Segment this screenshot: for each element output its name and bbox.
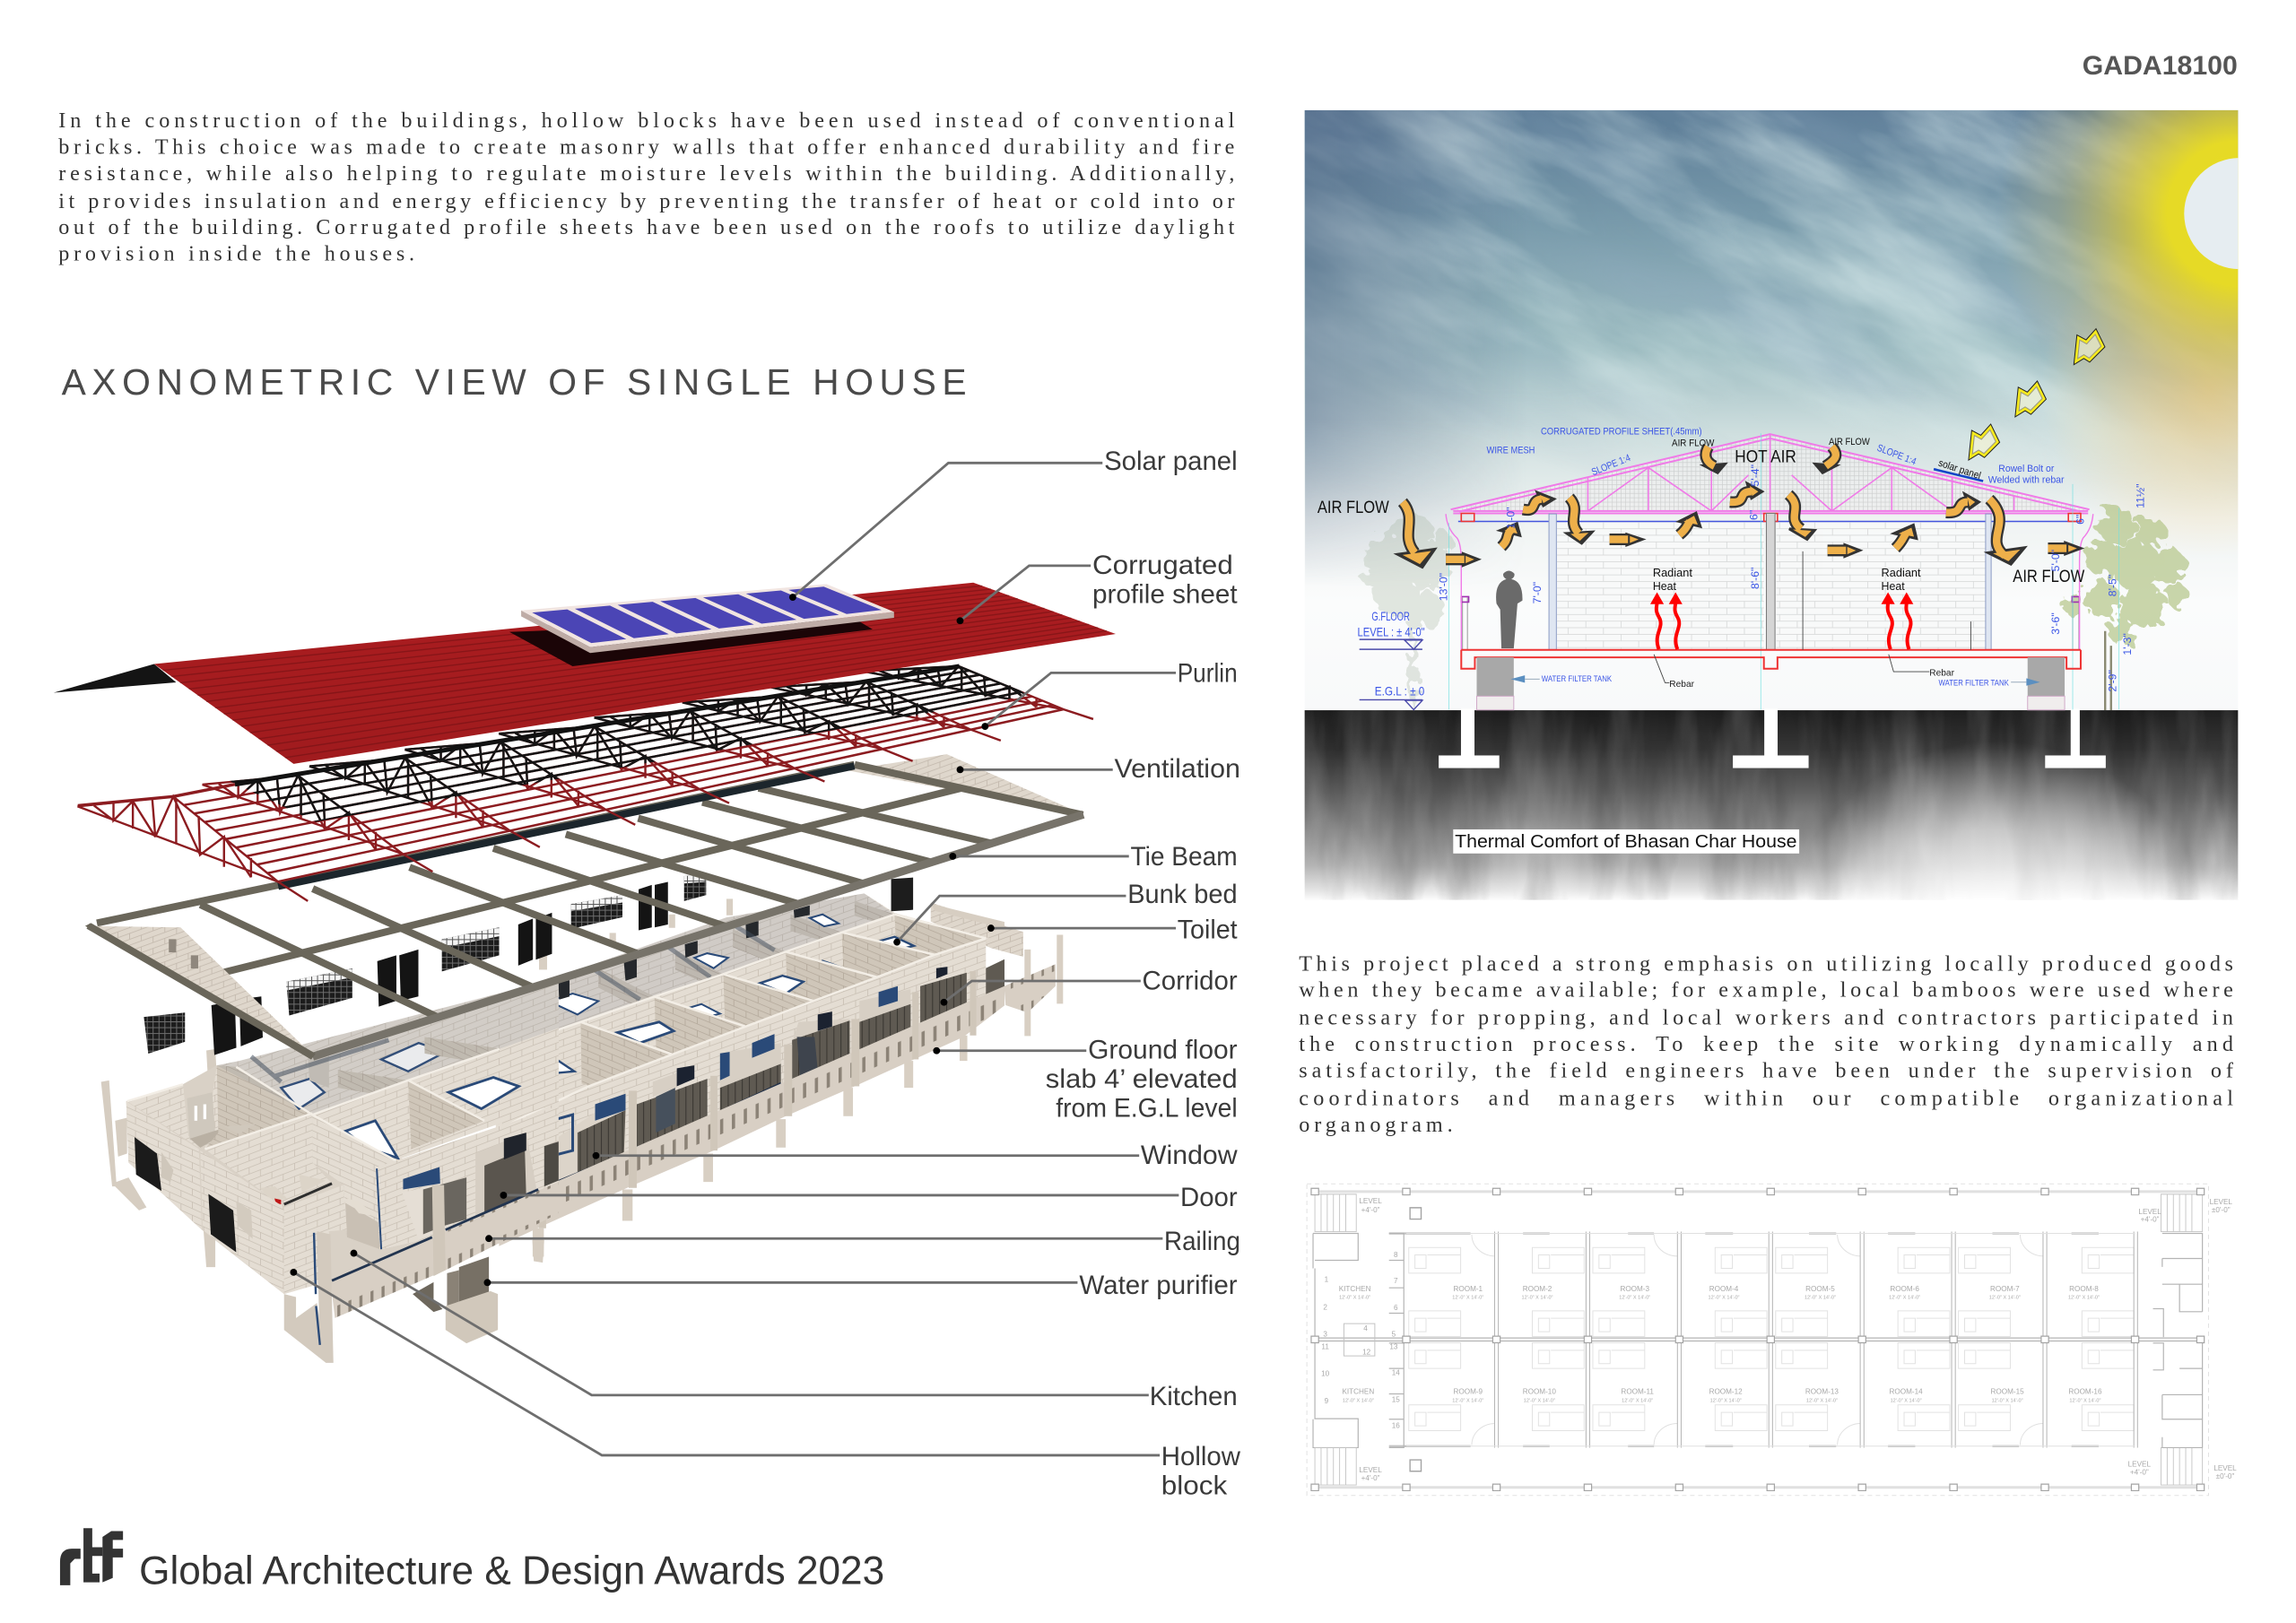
plan room sizes: 12'-0" X 14'-0" xyxy=(1806,1399,1838,1404)
plan labels xyxy=(1339,1197,2237,1482)
air flow arrows xyxy=(1397,447,2081,567)
plan kitchen numbers: 7 xyxy=(1394,1277,1398,1285)
panel: thermal comfort section image xyxy=(1304,109,2239,900)
section annotations: 13'-0" xyxy=(1437,573,1449,601)
section annotations: SLOPE 1:4 xyxy=(1875,443,1918,467)
small plinths xyxy=(1410,1208,1422,1219)
section annotations: Rebar xyxy=(1929,669,1955,679)
text block: hollow blocks description: out of the building. Corrugated profile sheets have been used on the roofs to utilize daylight xyxy=(58,215,1235,239)
component labels: Kitchen xyxy=(1150,1382,1238,1411)
axonometric exploded drawing xyxy=(54,447,1241,1501)
beam shadows xyxy=(518,924,775,1000)
leader lines and dots xyxy=(290,463,1178,1455)
solar panel on section xyxy=(1934,469,1983,482)
level markers xyxy=(1360,639,1422,709)
section annotations: 2'-9" xyxy=(2107,670,2119,692)
left tree xyxy=(1361,512,1453,710)
section annotations: Rowel Bolt or xyxy=(1998,464,2055,474)
plan labels: ROOM-12 xyxy=(1709,1388,1743,1396)
right tree xyxy=(2063,507,2187,644)
plan kitchen numbers: 4 xyxy=(1363,1324,1368,1332)
railing pillars xyxy=(539,971,977,1228)
plan labels: +4'-0" xyxy=(1361,1206,1380,1214)
section annotations xyxy=(1318,426,2147,699)
room end walls xyxy=(1389,1234,2099,1446)
toilets xyxy=(2153,1234,2203,1447)
text block: local goods: organogram. xyxy=(1299,1113,1453,1137)
text block: local goods: This project placed a strong emphasis on utilizing locally produced goods xyxy=(1299,951,2233,976)
plan room sizes: 12'-0" X 14'-0" xyxy=(1522,1295,1553,1300)
plan labels: ROOM-1 xyxy=(1454,1285,1483,1293)
section annotations: 1'-3" xyxy=(2121,633,2134,655)
near corner stair xyxy=(284,1294,326,1363)
plan room sizes: 12'-0" X 14'-0" xyxy=(1524,1399,1555,1404)
plan kitchen numbers: 9 xyxy=(1325,1397,1329,1405)
section annotations: 11½" xyxy=(2135,483,2147,508)
plan room sizes: 12'-0" X 14'-0" xyxy=(1889,1295,1920,1300)
plan room sizes: 12'-0" X 14'-0" xyxy=(1710,1399,1742,1404)
plan kitchen numbers: 15 xyxy=(1392,1395,1400,1403)
component labels: Window xyxy=(1141,1141,1238,1170)
section annotations: solar panel xyxy=(1937,458,1982,482)
corrugated roof xyxy=(54,583,1116,764)
slab and beams xyxy=(1461,650,2081,669)
plan kitchen numbers: 14 xyxy=(1392,1368,1400,1376)
section annotations: 6" xyxy=(2074,515,2087,525)
plan room sizes: 12'-0" X 14'-0" xyxy=(2069,1399,2100,1404)
plan kitchen numbers: 12 xyxy=(1362,1349,1371,1357)
section annotations: AIR FLOW xyxy=(1672,438,1715,449)
beams xyxy=(1315,1192,2201,1488)
caption: thermal comfort: Thermal Comfort of Bhasan Char House xyxy=(1455,831,1796,852)
component labels: Purlin xyxy=(1178,659,1238,689)
section annotations: 1'-0" xyxy=(1505,507,1518,529)
plan labels: ROOM-5 xyxy=(1805,1285,1835,1293)
corridor railing left part xyxy=(330,1182,559,1318)
door swings xyxy=(1472,1235,2043,1445)
section annotations: Radiant xyxy=(1653,566,1692,579)
right end wing, posts and railing extension xyxy=(931,902,1060,1036)
text block: hollow blocks description: bricks. This choice was made to create masonry walls that offer enhanced durability and fire xyxy=(58,135,1234,159)
plan labels: LEVEL xyxy=(1359,1197,1382,1205)
sun xyxy=(2184,158,2239,269)
wall top caps xyxy=(502,915,986,1055)
truss roof xyxy=(1451,434,2090,514)
plan labels: KITCHEN xyxy=(1339,1285,1371,1293)
section annotations: WATER FILTER TANK xyxy=(1939,678,2009,687)
text block: local goods: necessary for propping, and local workers and contractors participated in xyxy=(1299,1006,2233,1030)
plan kitchen numbers: 8 xyxy=(1394,1251,1398,1259)
plan outline xyxy=(1307,1184,2209,1496)
text block: local goods xyxy=(1299,951,2234,1137)
logo: rtf xyxy=(60,1528,123,1585)
section annotations: E.G.L : ± 0 xyxy=(1375,684,1425,699)
plan kitchen numbers xyxy=(1321,1251,1400,1430)
section annotations: 5'-0" xyxy=(2049,550,2062,571)
plan labels: ROOM-11 xyxy=(1621,1388,1654,1396)
section annotations: WATER FILTER TANK xyxy=(1542,674,1612,683)
tie beam grid with gables xyxy=(85,754,1083,1060)
plan labels: KITCHEN xyxy=(1342,1388,1374,1396)
plan labels: +4'-0" xyxy=(1361,1474,1380,1482)
tree trunk xyxy=(2105,631,2111,710)
plan labels: ROOM-9 xyxy=(1454,1388,1483,1396)
component labels: profile sheet xyxy=(1092,580,1238,610)
plan labels: ±0'-0" xyxy=(2212,1206,2231,1214)
plan room sizes: 12'-0" X 14'-0" xyxy=(1452,1399,1483,1404)
plan room sizes: 12'-0" X 14'-0" xyxy=(1989,1295,2021,1300)
wall top caps xyxy=(127,1049,500,1163)
plan kitchen numbers: 10 xyxy=(1321,1369,1330,1377)
component labels: Solar panel xyxy=(1104,447,1238,476)
columns xyxy=(1311,1188,2205,1490)
component labels: Corridor xyxy=(1143,967,1238,996)
text block: local goods: the construction process. To keep the site working dynamically and xyxy=(1299,1032,2233,1056)
solar panel xyxy=(509,584,894,666)
text block: hollow blocks description: provision inside the houses. xyxy=(58,242,414,266)
section annotations: 8'-5" xyxy=(2107,575,2119,596)
far row left xyxy=(127,977,559,1167)
component labels xyxy=(1046,447,1241,1501)
component labels: from E.G.L level xyxy=(1056,1094,1238,1124)
plan labels: ROOM-2 xyxy=(1523,1285,1552,1293)
component labels: Ventilation xyxy=(1115,754,1240,784)
corner post and pillars xyxy=(314,1185,538,1363)
heading: axonometric view: AXONOMETRIC VIEW OF SINGLE HOUSE xyxy=(62,361,967,403)
sky xyxy=(1304,109,2239,585)
text block: hollow blocks description: resistance, while also helping to regulate moisture levels within the building. Additionally, xyxy=(58,161,1234,186)
plan labels: ROOM-16 xyxy=(2068,1388,2102,1396)
section annotations: 3'-6" xyxy=(2049,612,2062,635)
section annotations: Welded with rebar xyxy=(1988,474,2065,485)
yellow solar arrows xyxy=(1970,332,2103,457)
partition walls xyxy=(1494,1232,2137,1447)
plan kitchen numbers: 16 xyxy=(1392,1422,1400,1430)
far row of rooms xyxy=(496,893,989,1195)
front wall with openings xyxy=(377,1106,559,1249)
reference code: GADA18100 xyxy=(2083,51,2238,81)
text block: local goods: satisfactorily, the field engineers have been under the supervision of xyxy=(1299,1058,2234,1082)
roof hatch infill xyxy=(1457,434,2084,511)
members in roof shadow xyxy=(230,665,1028,821)
plan labels: ROOM-6 xyxy=(1890,1285,1919,1293)
section annotations: 5'-4" xyxy=(1749,464,1761,486)
component labels: Door xyxy=(1180,1183,1238,1212)
gable truss xyxy=(77,796,308,901)
plan room sizes: 12'-0" X 14'-0" xyxy=(1992,1399,2023,1404)
plan labels: +4'-0" xyxy=(2130,1469,2149,1477)
plan labels: ROOM-7 xyxy=(1990,1285,2020,1293)
plan labels: ROOM-13 xyxy=(1805,1388,1839,1396)
section annotations: AIR FLOW xyxy=(2013,567,2085,586)
component labels: Bunk bed xyxy=(1127,880,1238,909)
component labels: Toilet xyxy=(1178,915,1238,944)
right gable xyxy=(847,754,1083,814)
building section drawing xyxy=(1360,433,2119,710)
component labels: Corrugated xyxy=(1092,551,1233,580)
front corridor wall xyxy=(499,938,986,1207)
plan kitchen numbers: 6 xyxy=(1394,1304,1398,1312)
text block: local goods: when they became available; for example, local bamboos were used where xyxy=(1299,978,2233,1002)
plan labels: ROOM-14 xyxy=(1890,1388,1923,1396)
ridge xyxy=(235,666,960,785)
plan kitchen numbers: 5 xyxy=(1392,1330,1396,1338)
ring beam and columns xyxy=(1446,433,2119,709)
radiant heat arrows xyxy=(1657,602,1911,649)
plan room sizes: 12'-0" X 14'-0" xyxy=(2068,1295,2100,1300)
beams xyxy=(88,765,1083,1056)
house silhouette backing xyxy=(126,1065,446,1294)
plan room sizes: 12'-0" X 14'-0" xyxy=(1891,1399,1922,1404)
plan labels: LEVEL xyxy=(2213,1464,2237,1472)
plan kitchen numbers: 1 xyxy=(1325,1275,1329,1284)
text block: hollow blocks description: In the construction of the buildings, hollow blocks have been used instead of conventional xyxy=(58,108,1235,133)
water filter tanks xyxy=(1477,657,2065,710)
plan labels: LEVEL xyxy=(2138,1208,2161,1216)
end posts and low stair xyxy=(101,1049,544,1267)
ground xyxy=(1304,710,2239,901)
corridor openings xyxy=(499,938,986,1186)
left gable xyxy=(85,926,313,1055)
plan room sizes: 12'-0" X 14'-0" xyxy=(1805,1295,1836,1300)
text block: local goods: coordinators and managers within our compatible organizational xyxy=(1299,1086,2233,1110)
near row of rooms xyxy=(502,915,986,1117)
plan room sizes: 12'-0" X 14'-0" xyxy=(1343,1399,1374,1404)
floor plan xyxy=(1307,1184,2237,1496)
plan room sizes: 12'-0" X 14'-0" xyxy=(1709,1295,1740,1300)
house right part xyxy=(496,893,1004,1256)
plan labels: ±0'-0" xyxy=(2216,1472,2234,1480)
section annotations: AIR FLOW xyxy=(1829,437,1870,447)
plan labels: ROOM-10 xyxy=(1523,1388,1556,1396)
rebar leaders xyxy=(1654,551,1970,682)
component labels: Tie Beam xyxy=(1130,842,1238,872)
right wing strip and posts xyxy=(533,898,1004,1256)
plan labels: ROOM-3 xyxy=(1620,1285,1650,1293)
dark band over the tie beam xyxy=(278,766,855,886)
purlin and truss frame xyxy=(77,666,1093,901)
left end wall xyxy=(126,1101,347,1294)
plan kitchen numbers: 2 xyxy=(1323,1303,1327,1311)
plan room sizes xyxy=(1339,1295,2100,1404)
person silhouette xyxy=(1496,570,1522,648)
section annotations: 6" xyxy=(1748,510,1761,520)
radiant heat arrowheads xyxy=(1650,592,1913,604)
plan room sizes: 12'-0" X 14'-0" xyxy=(1452,1295,1483,1300)
text block: hollow blocks description: it provides insulation and energy efficiency by preventing the transfer of heat or cold into or xyxy=(58,189,1234,213)
stairs xyxy=(1315,1194,2203,1485)
corridor railing right part xyxy=(499,986,1004,1246)
component labels: Railing xyxy=(1164,1227,1240,1256)
section annotations: LEVEL : ± 4'-0" xyxy=(1358,624,1425,638)
near room walls xyxy=(127,1028,559,1249)
plan labels: ROOM-4 xyxy=(1709,1285,1739,1293)
far beds and doors xyxy=(549,915,839,1014)
plan kitchen numbers: 3 xyxy=(1323,1330,1327,1338)
bunk bed furniture xyxy=(1409,1247,2134,1430)
footer title: Global Architecture & Design Awards 2023 xyxy=(139,1549,884,1593)
section annotations: 7'-0" xyxy=(1531,582,1544,603)
plan labels: LEVEL xyxy=(2210,1198,2232,1206)
plan room sizes: 12'-0" X 14'-0" xyxy=(1622,1399,1653,1404)
plan labels: LEVEL xyxy=(1359,1466,1382,1474)
section annotations: Radiant xyxy=(1882,566,1921,579)
plan labels: ROOM-15 xyxy=(1991,1388,2024,1396)
water purifier xyxy=(413,1257,498,1343)
plan labels: +4'-0" xyxy=(2141,1215,2160,1223)
foundations xyxy=(1439,708,2106,768)
section annotations: Rebar xyxy=(1669,680,1695,690)
plan room sizes: 12'-0" X 14'-0" xyxy=(1619,1295,1650,1300)
section annotations: Heat xyxy=(1653,579,1676,593)
red members xyxy=(184,666,1093,881)
section annotations: 8'-6" xyxy=(1749,568,1761,589)
section annotations: HOT AIR xyxy=(1735,447,1796,467)
plan room sizes: 12'-0" X 14'-0" xyxy=(1339,1295,1370,1300)
component labels: slab 4’ elevated xyxy=(1046,1064,1238,1094)
section annotations: SLOPE 1:4 xyxy=(1590,453,1632,478)
text block: hollow blocks description xyxy=(58,108,1235,266)
component labels: Ground floor xyxy=(1088,1035,1238,1064)
plan kitchen numbers: 11 xyxy=(1321,1342,1329,1350)
plan labels: LEVEL xyxy=(2128,1461,2151,1469)
section annotations: AIR FLOW xyxy=(1318,498,1389,517)
plan labels: ROOM-8 xyxy=(2069,1285,2099,1293)
component labels: Water purifier xyxy=(1079,1271,1238,1300)
section annotations: Heat xyxy=(1882,579,1905,593)
brick wall infill xyxy=(1557,523,1987,648)
kitchen walls xyxy=(1313,1234,1404,1447)
component labels: Hollow xyxy=(1161,1442,1241,1471)
section annotations: WIRE MESH xyxy=(1487,446,1535,456)
component labels: block xyxy=(1161,1471,1228,1501)
house left part with kitchen xyxy=(101,977,559,1363)
floating windows and doors xyxy=(144,874,913,1055)
section annotations: G.FLOOR xyxy=(1371,609,1410,623)
section annotations: CORRUGATED PROFILE SHEET(.45mm) xyxy=(1541,426,1702,437)
plan kitchen numbers: 13 xyxy=(1389,1342,1398,1350)
